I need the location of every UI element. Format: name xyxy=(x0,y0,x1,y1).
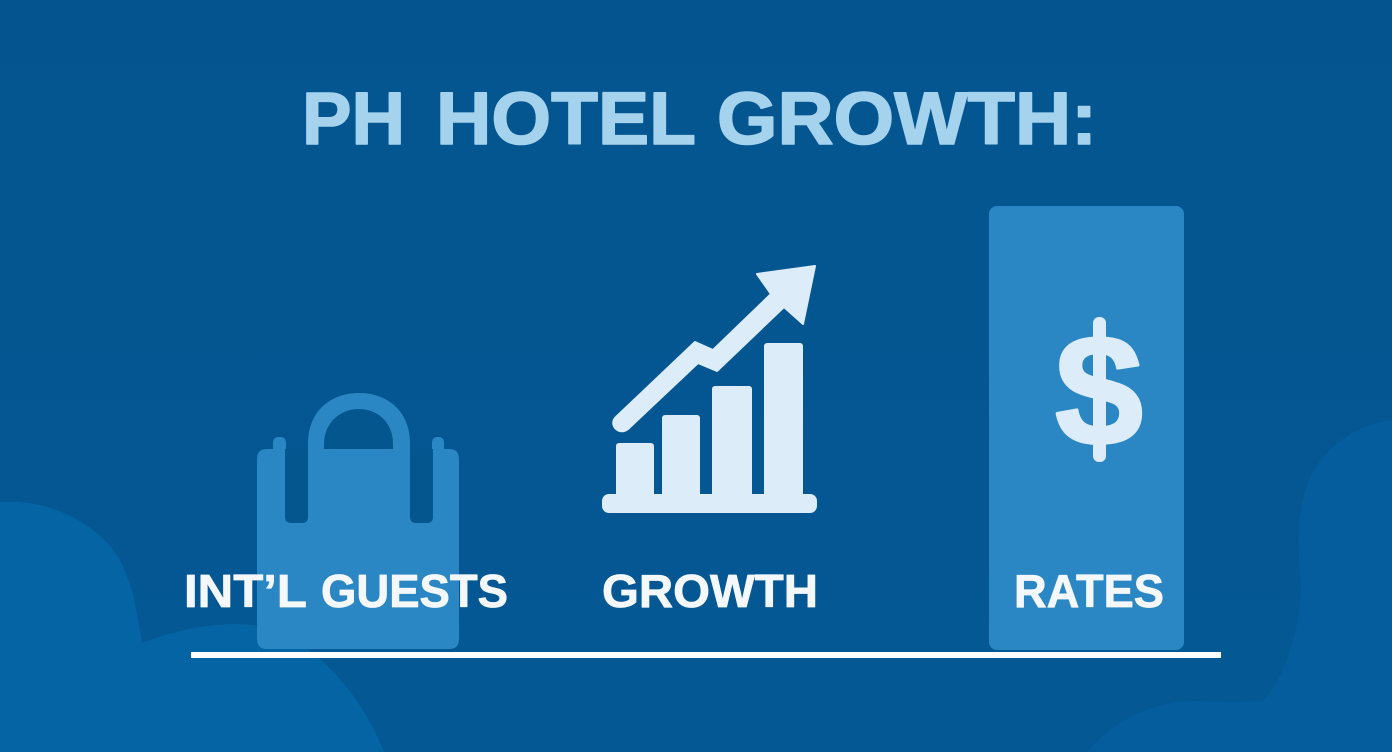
baseline rule xyxy=(191,652,1221,658)
chart baseline xyxy=(602,494,817,513)
label: rates: RATES xyxy=(1014,565,1164,617)
background blob: bottom right xyxy=(1087,420,1392,752)
icon: growth chart xyxy=(602,266,817,513)
chart bars xyxy=(616,343,803,503)
icon: dollar sign: $ xyxy=(1055,303,1143,479)
label: growth: GROWTH xyxy=(602,565,818,617)
title: GROWTH: xyxy=(717,77,1097,160)
label: international guests: GUESTS xyxy=(321,565,508,617)
panel: rates bar xyxy=(989,206,1184,650)
title: PH xyxy=(302,77,405,160)
icon: shopping bag xyxy=(257,393,459,649)
label: international guests: INT’L xyxy=(184,565,307,617)
title: HOTEL xyxy=(436,77,696,160)
background blob: bottom left xyxy=(0,502,384,752)
chart arrow xyxy=(613,266,815,431)
